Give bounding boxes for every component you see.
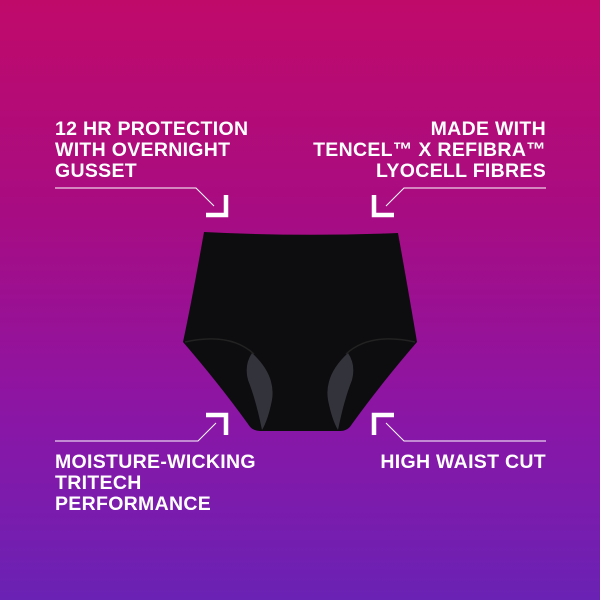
callout text: overnight gusset: WITH OVERNIGHT: [55, 139, 230, 161]
callout text: high waist: HIGH WAIST CUT: [380, 451, 546, 473]
callout text: overnight gusset: [55, 118, 248, 182]
callout text: overnight gusset: GUSSET: [55, 160, 137, 182]
pointer: bottom-left: [55, 415, 226, 441]
callout text: moisture-wicking: PERFORMANCE: [55, 493, 211, 515]
callout text: tencel fibres: MADE WITH: [431, 118, 546, 140]
pointer: top-right: [374, 188, 546, 215]
pointer: top-left: [55, 188, 226, 215]
pointer: bottom-right: [374, 415, 546, 441]
callout text: tencel fibres: LYOCELL FIBRES: [376, 160, 546, 182]
callout text: moisture-wicking: MOISTURE-WICKING: [55, 451, 256, 473]
product: black high waist brief: [183, 232, 417, 431]
callout text: moisture-wicking: [55, 451, 256, 515]
callout text: moisture-wicking: TRITECH: [55, 472, 142, 494]
callout text: tencel fibres: [313, 118, 546, 182]
callout text: overnight gusset: 12 HR PROTECTION: [55, 118, 248, 140]
callout text: tencel fibres: TENCEL™ X REFIBRA™: [313, 139, 546, 161]
